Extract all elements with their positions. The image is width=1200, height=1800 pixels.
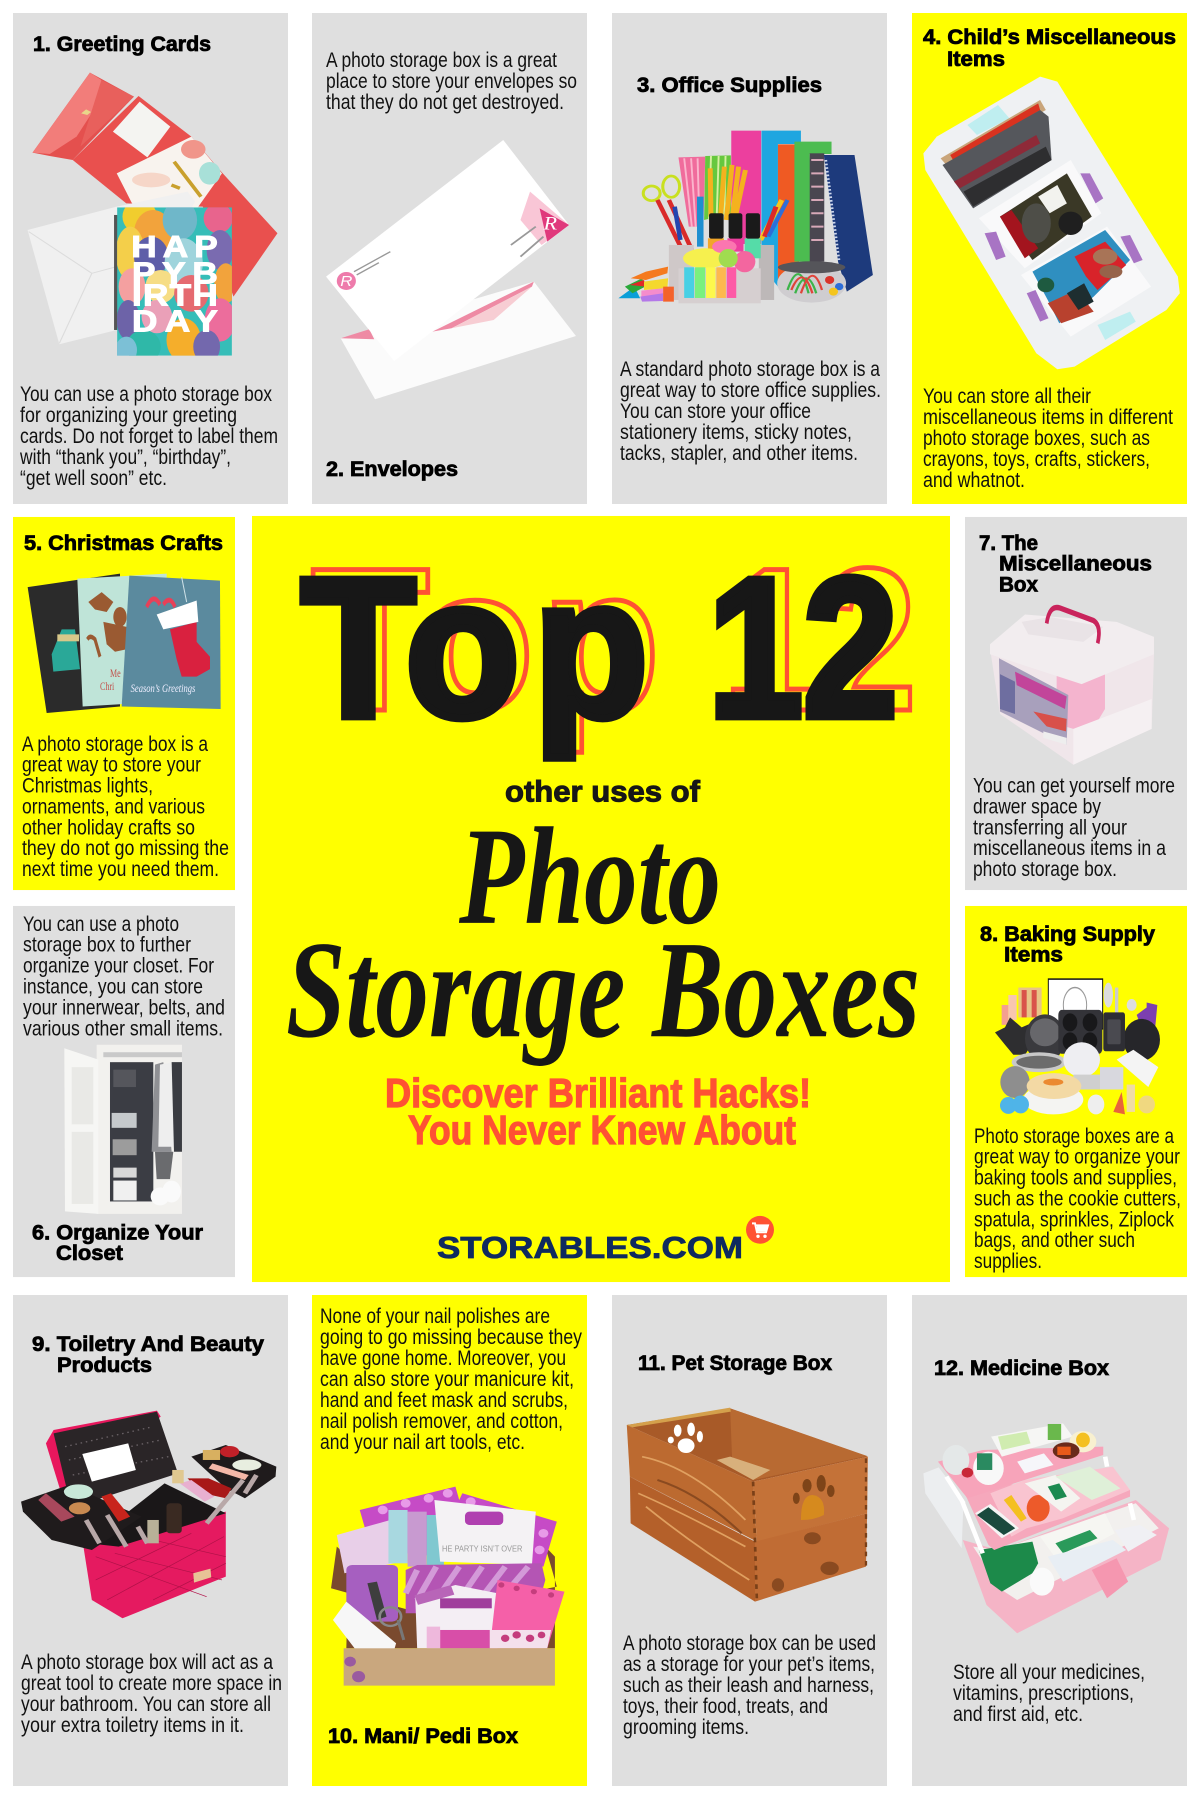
body text: and first aid, etc. (953, 1703, 1083, 1726)
panel: center title (252, 516, 950, 1282)
middle row (13, 516, 1187, 1282)
heading: office supplies: 3. Office Supplies (637, 74, 822, 97)
heading: toiletry and beauty products: 9. Toiletry And Beauty (32, 1333, 264, 1356)
image: mani pedi box: HE PARTY ISN’T OVER (442, 1544, 523, 1553)
body text: vitamins, prescriptions, (953, 1682, 1134, 1705)
heading: greeting cards: 1. Greeting Cards (33, 33, 211, 56)
image: tray of kids' items (923, 77, 1180, 369)
image: baking tools (995, 979, 1160, 1114)
heading: organize your closet: 6. Organize Your (32, 1221, 203, 1244)
panel: 8 baking supply items (965, 906, 1187, 1277)
image: christmas cards: Season’s Greetings (131, 683, 195, 696)
tagline: Discover Brilliant Hacks! (385, 1070, 811, 1116)
heading: mani pedi box: 10. Mani/ Pedi Box (328, 1725, 518, 1748)
body text: storage box to further (23, 934, 191, 957)
title outline: top 12: Top (311, 526, 660, 754)
image: pink makeup case (21, 1411, 276, 1618)
body text: have gone home. Moreover, you (320, 1347, 566, 1370)
brand: storables.com: STORABLES.COM (437, 1230, 743, 1265)
body text: organize your closet. For (23, 955, 214, 978)
body text: grooming items. (623, 1716, 749, 1739)
heading: christmas crafts: 5. Christmas Crafts (24, 532, 223, 555)
heading: baking supply items (980, 923, 1155, 967)
body text: great way to store office supplies. (620, 379, 881, 402)
panel: 2 envelopes (312, 13, 587, 504)
title outline: top 12: 12 (722, 526, 917, 754)
heading: toiletry and beauty products: Products (57, 1354, 152, 1377)
panel: 5 christmas crafts (13, 517, 235, 890)
heading: pet storage box: 11. Pet Storage Box (638, 1352, 832, 1375)
body text: great tool to create more space in (21, 1672, 282, 1695)
body text: You can store all their (923, 385, 1091, 408)
image: christmas cards: Chri (100, 681, 114, 694)
body text: with “thank you”, “birthday”, (19, 446, 231, 469)
panel: 1 greeting cards (13, 13, 288, 504)
title: top 12: 12 (708, 537, 898, 759)
heading: toiletry and beauty products (32, 1333, 264, 1377)
title: top 12: Top (301, 538, 648, 760)
image: office supplies (618, 131, 873, 303)
heading: baking supply items: 8. Baking Supply (980, 923, 1155, 946)
title: photo storage boxes (286, 800, 920, 1067)
body text (620, 358, 881, 465)
title: photo storage boxes: Storage Boxes (286, 914, 920, 1067)
body text: miscellaneous items in a (973, 837, 1166, 860)
body text: and whatnot. (923, 469, 1025, 492)
body text: transferring all your (973, 816, 1127, 839)
body text (953, 1661, 1145, 1726)
body text: and your nail art tools, etc. (320, 1431, 525, 1454)
heading: the miscellaneous box (979, 532, 1152, 597)
image: wardrobe with hanging organizer (64, 1045, 182, 1214)
body text (326, 49, 577, 114)
heading: medicine box: 12. Medicine Box (934, 1357, 1109, 1380)
body text (320, 1305, 582, 1454)
image: greeting cards and envelopes: IRTH (132, 278, 218, 312)
subtitle: other uses of: other uses of (505, 776, 701, 808)
panel: 3 office supplies (612, 13, 887, 504)
title: top 12 (301, 537, 898, 760)
title outline: top 12 (311, 526, 917, 754)
image: envelopes: R (340, 274, 352, 290)
body text (973, 775, 1175, 881)
image: christmas cards (28, 574, 221, 713)
heading: organize your closet: Closet (56, 1242, 123, 1265)
body text: as a storage for your pet’s items, (623, 1653, 875, 1676)
body text (21, 1651, 282, 1737)
body text: You can store your office (620, 400, 811, 423)
heading: child's miscellaneous items: Items (947, 48, 1005, 71)
body text: that they do not get destroyed. (326, 91, 564, 114)
body text: photo storage boxes, such as (923, 427, 1150, 450)
image: greeting cards and envelopes (28, 73, 277, 363)
body text: supplies. (974, 1250, 1042, 1273)
body text: place to store your envelopes so (326, 70, 577, 93)
body text: they do not go missing the (22, 837, 229, 860)
body text: tacks, stapler, and other items. (620, 442, 858, 465)
body text (923, 385, 1173, 492)
body text: your innerwear, belts, and (23, 996, 225, 1019)
body text: going to go missing because they (320, 1326, 582, 1349)
body text: nail polish remover, and cotton, (320, 1410, 563, 1433)
panel: 4 child's miscellaneous items (912, 13, 1187, 504)
image: greeting cards and envelopes: DAY (132, 304, 218, 338)
body text: A photo storage box is a great (326, 49, 557, 72)
image: pink medicine box (923, 1423, 1169, 1633)
tagline: You Never Knew About (408, 1107, 796, 1153)
image: greeting cards and envelopes: PYB (132, 255, 218, 290)
icon: shopping cart badge (746, 1216, 774, 1244)
body text (623, 1632, 876, 1739)
heading: organize your closet (32, 1221, 203, 1265)
body text: bags, and other such (974, 1229, 1135, 1252)
heading: child's miscellaneous items: 4. Child’s Miscellaneous (923, 26, 1176, 49)
body text (22, 733, 229, 881)
panel: 9 toiletry and beauty products (13, 1295, 288, 1786)
body text (23, 913, 225, 1040)
body text: toys, their food, treats, and (623, 1695, 828, 1718)
heading: the miscellaneous box: 7. The (979, 532, 1038, 555)
body text: other holiday crafts so (22, 816, 195, 839)
title: photo storage boxes: Photo (458, 800, 721, 954)
body text: “get well soon” etc. (20, 467, 167, 490)
image: envelopes (326, 140, 576, 399)
body text: A photo storage box can be used (623, 1632, 876, 1655)
image: clear box with red handle (990, 607, 1154, 765)
body text: for organizing your greeting (20, 404, 237, 427)
body text (19, 383, 278, 490)
body text: You can use a photo storage box (20, 383, 272, 406)
body text: crayons, toys, crafts, stickers, (923, 448, 1150, 471)
body text: can also store your manicure kit, (320, 1368, 574, 1391)
body text: photo storage box. (973, 858, 1117, 881)
body text: A photo storage box will act as a (21, 1651, 273, 1674)
panel: 10 mani pedi box (312, 1295, 587, 1786)
panel: 12 medicine box (912, 1295, 1187, 1786)
body text: A photo storage box is a (22, 733, 208, 756)
heading: child's miscellaneous items (923, 26, 1176, 71)
body text: Christmas lights, (22, 775, 153, 798)
image: greeting cards and envelopes: HAP (131, 229, 218, 263)
body text: ornaments, and various (22, 795, 205, 818)
body text: your extra toiletry items in it. (21, 1714, 244, 1737)
image: wooden pet crate (627, 1408, 868, 1602)
heading: the miscellaneous box: Miscellaneous (999, 553, 1152, 576)
body text: Store all your medicines, (953, 1661, 1145, 1684)
body text: great way to store your (22, 754, 201, 777)
body text: None of your nail polishes are (320, 1305, 550, 1328)
panel: 6 organize your closet (13, 906, 235, 1277)
body text: your bathroom. You can store all (21, 1693, 271, 1716)
body text: instance, you can store (23, 976, 203, 999)
body text: stationery items, sticky notes, (620, 421, 852, 444)
image: christmas cards: Me (110, 668, 121, 681)
tagline (385, 1070, 811, 1153)
body text: A standard photo storage box is a (620, 358, 880, 381)
body text (974, 1125, 1181, 1273)
heading: envelopes: 2. Envelopes (326, 458, 458, 481)
body text: You can use a photo (23, 913, 179, 936)
panel: 7 the miscellaneous box (965, 517, 1187, 890)
body text: drawer space by (973, 795, 1101, 818)
body text: next time you need them. (22, 858, 219, 881)
body text: cards. Do not forget to label them (20, 425, 278, 448)
body text: various other small items. (23, 1017, 223, 1040)
heading: baking supply items: Items (1004, 944, 1063, 967)
heading: the miscellaneous box: Box (999, 574, 1038, 597)
panel: 11 pet storage box (612, 1295, 887, 1786)
image: envelopes: R (542, 212, 557, 234)
body text: such as their leash and harness, (623, 1674, 874, 1697)
body text: hand and feet mask and scrubs, (320, 1389, 568, 1412)
image: mani pedi box (331, 1487, 564, 1686)
